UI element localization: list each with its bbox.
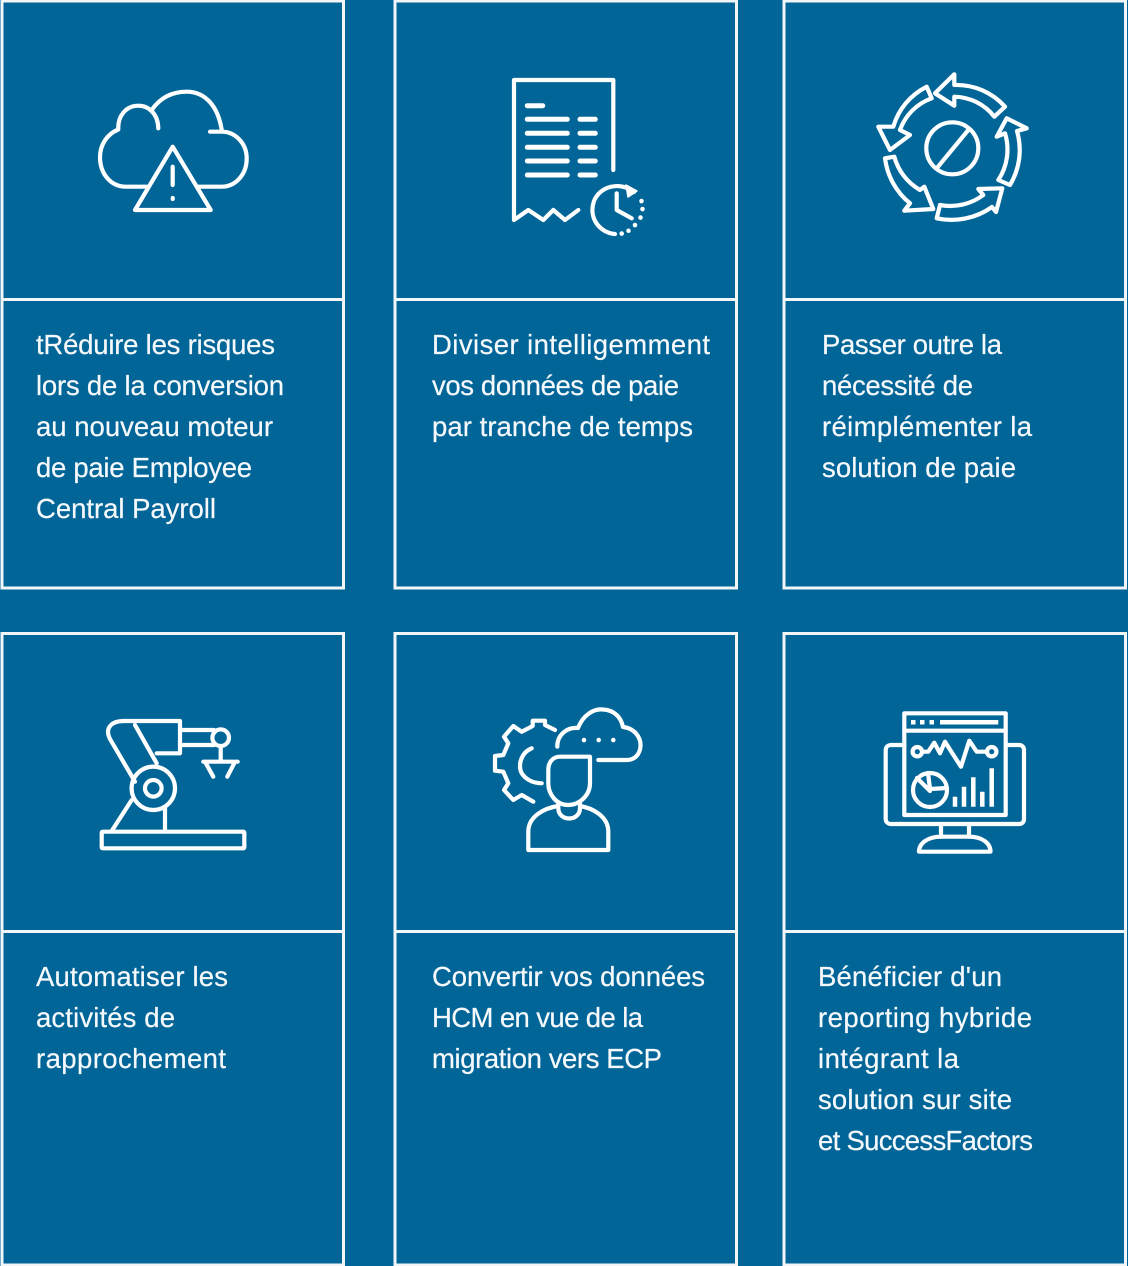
text: automate reconciliation: Automatiser les [36, 961, 228, 992]
panel: automate reconciliation [2, 634, 344, 1265]
icon: document with clock [514, 80, 642, 234]
text: hybrid reporting [818, 961, 1033, 1156]
text: convert HCM data: HCM en vue de la [432, 1002, 644, 1033]
text: hybrid reporting: reporting hybride [818, 1002, 1032, 1033]
panel: hybrid reporting [784, 634, 1126, 1265]
icon: person with gear and cloud [495, 709, 641, 850]
icon: robot arm [102, 721, 244, 848]
text: hybrid reporting: solution sur site [818, 1084, 1012, 1115]
panel: split payroll data [395, 1, 736, 588]
text: hybrid reporting: et SuccessFactors [818, 1125, 1033, 1156]
text: split payroll data: par tranche de temps [432, 411, 693, 442]
text: avoid reimplementation: réimplémenter la [822, 411, 1033, 442]
text: automate reconciliation [36, 961, 228, 1074]
text: split payroll data: Diviser intelligemment [432, 329, 710, 360]
text: reduce risks [36, 329, 284, 524]
text: avoid reimplementation: nécessité de [822, 370, 973, 401]
icon: cloud with warning triangle [100, 92, 247, 210]
icon: cycle arrows with prohibition sign [878, 74, 1027, 220]
text: split payroll data: vos données de paie [432, 370, 679, 401]
text: hybrid reporting: Bénéficier d'un [818, 961, 1002, 992]
text: convert HCM data: migration vers ECP [432, 1043, 662, 1074]
text: reduce risks: Central Payroll [36, 493, 216, 524]
text: hybrid reporting: intégrant la [818, 1043, 960, 1074]
panel: avoid reimplementation [784, 1, 1126, 588]
icon: monitor with dashboard [886, 713, 1024, 852]
text: convert HCM data [432, 961, 705, 1074]
text: convert HCM data: Convertir vos données [432, 961, 705, 992]
text: split payroll data [432, 329, 710, 442]
panel: convert HCM data [395, 634, 736, 1265]
text: avoid reimplementation: solution de paie [822, 452, 1016, 483]
text: automate reconciliation: activités de [36, 1002, 175, 1033]
text: avoid reimplementation [822, 329, 1033, 483]
text: automate reconciliation: rapprochement [36, 1043, 226, 1074]
text: avoid reimplementation: Passer outre la [822, 329, 1003, 360]
panel: reduce risks [2, 1, 344, 588]
text: reduce risks: tRéduire les risques [36, 329, 275, 360]
text: reduce risks: de paie Employee [36, 452, 252, 483]
text: reduce risks: au nouveau moteur [36, 411, 273, 442]
text: reduce risks: lors de la conversion [36, 370, 284, 401]
